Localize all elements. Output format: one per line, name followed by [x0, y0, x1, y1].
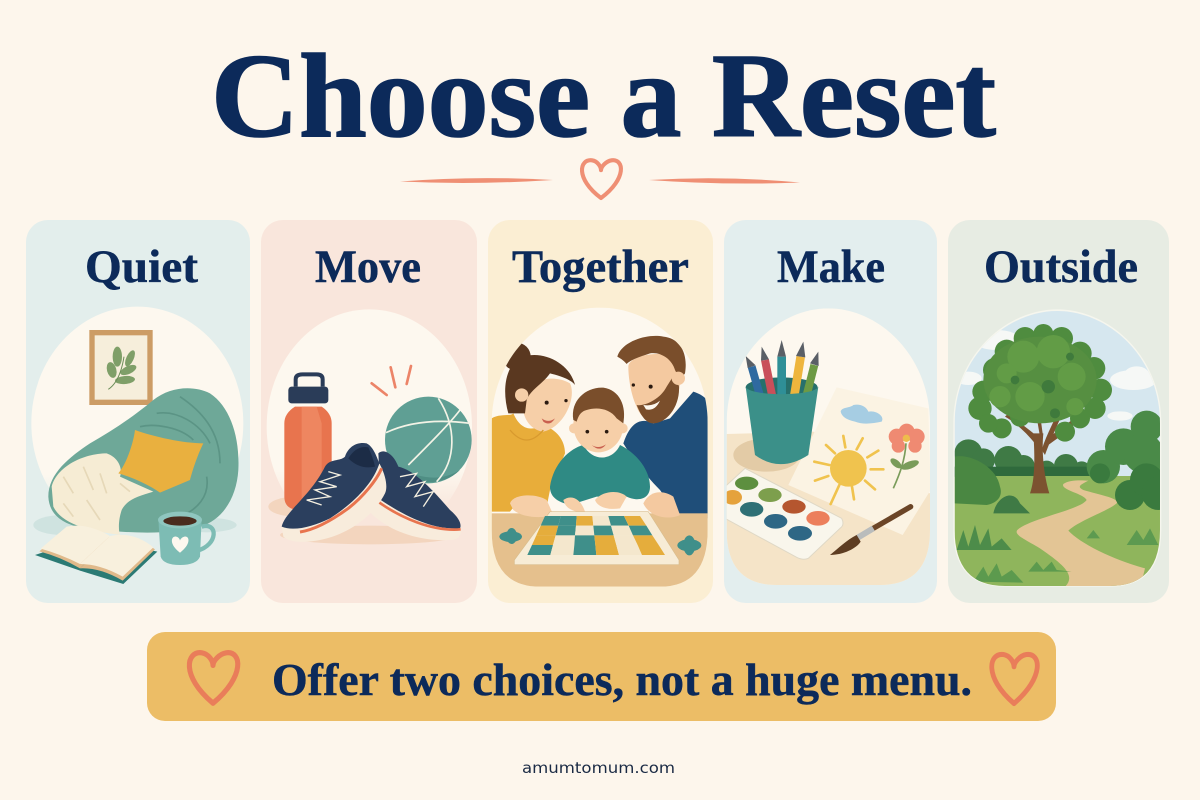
illustration: family doing a puzzle [490, 307, 710, 588]
panel: Quiet [26, 220, 250, 603]
icon: heart right [992, 654, 1037, 703]
illustration: beanbag reading nook [31, 307, 243, 584]
panel: Make [723, 220, 937, 603]
illustration detail: father [617, 336, 710, 518]
footer: amumtomum.com [522, 759, 675, 777]
illustration detail: puzzle board [514, 512, 679, 565]
heading: Outside: Outside [984, 241, 1138, 293]
illustration: bottle, trainers and ball [267, 309, 472, 544]
icon: heart left [189, 653, 238, 703]
heading: Make: Make [777, 241, 885, 293]
callout text: Offer two choices, not a huge menu. [272, 655, 972, 705]
panel: Move [261, 220, 477, 603]
illustration: tree and path [953, 309, 1175, 589]
illustration detail: paintbrush [830, 507, 911, 555]
callout banner [147, 632, 1056, 721]
heading: Quiet: Quiet [85, 241, 198, 293]
title: Choose a Reset [211, 29, 996, 162]
divider with heart [400, 160, 800, 198]
illustration: art supplies [723, 307, 932, 587]
heading: Move: Move [315, 241, 421, 293]
illustration detail: child [550, 388, 650, 512]
illustration detail: paint palette [723, 468, 843, 559]
illustration detail: mother [492, 343, 575, 512]
heading: Together: Together [512, 241, 689, 293]
panel: Together [488, 220, 713, 603]
panel: Outside [948, 220, 1175, 603]
illustration detail: tree canopy [968, 324, 1112, 442]
